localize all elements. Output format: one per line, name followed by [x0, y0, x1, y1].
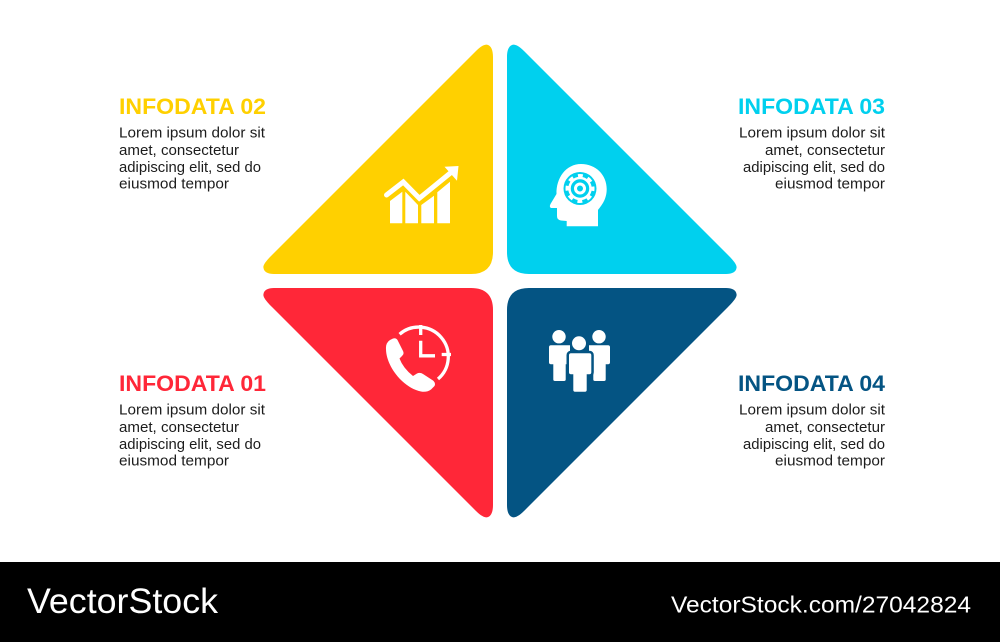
panel: cyan triangle	[507, 45, 737, 274]
text block: infodata 02: eiusmod tempor	[119, 176, 229, 192]
text block: infodata 04	[738, 371, 886, 470]
text block: infodata 03: Lorem ipsum dolor sit	[739, 124, 886, 142]
icon: head with gear	[550, 164, 607, 226]
text block: infodata 04: adipiscing elit, sed do	[743, 436, 885, 453]
text block: infodata 02: Lorem ipsum dolor sit	[119, 124, 266, 142]
text block: infodata 03: amet, consectetur	[765, 142, 885, 159]
text block: infodata 02	[119, 94, 266, 192]
footer bar with watermark	[0, 562, 1000, 642]
icon: rising bar chart with arrow	[386, 166, 458, 223]
text block: infodata 03: adipiscing elit, sed do	[743, 159, 885, 176]
text block: infodata 02: INFODATA 02	[119, 94, 266, 119]
text block: infodata 04: Lorem ipsum dolor sit	[739, 402, 886, 418]
panel: red triangle	[263, 288, 493, 517]
icon: group of three people	[549, 330, 610, 392]
text block: infodata 04: eiusmod tempor	[775, 452, 885, 470]
panel: yellow triangle	[263, 45, 493, 274]
text block: infodata 01: Lorem ipsum dolor sit	[119, 402, 266, 418]
footer bar with watermark: VectorStock.com/27042824	[671, 592, 971, 618]
text block: infodata 03: INFODATA 03	[738, 94, 885, 119]
text block: infodata 01: eiusmod tempor	[119, 452, 229, 470]
text block: infodata 04: amet, consectetur	[765, 419, 885, 436]
footer bar with watermark: VectorStock	[27, 582, 219, 621]
text block: infodata 04: INFODATA 04	[738, 371, 886, 396]
panel: navy triangle	[507, 288, 737, 517]
text block: infodata 03	[738, 94, 886, 192]
text block: infodata 03: eiusmod tempor	[775, 176, 885, 192]
text block: infodata 01	[119, 371, 266, 470]
text block: infodata 02: adipiscing elit, sed do	[119, 159, 261, 176]
icon: phone and clock	[386, 325, 451, 392]
text block: infodata 02: amet, consectetur	[119, 142, 239, 159]
text block: infodata 01: INFODATA 01	[119, 371, 266, 396]
text block: infodata 01: amet, consectetur	[119, 419, 239, 436]
text block: infodata 01: adipiscing elit, sed do	[119, 436, 261, 453]
